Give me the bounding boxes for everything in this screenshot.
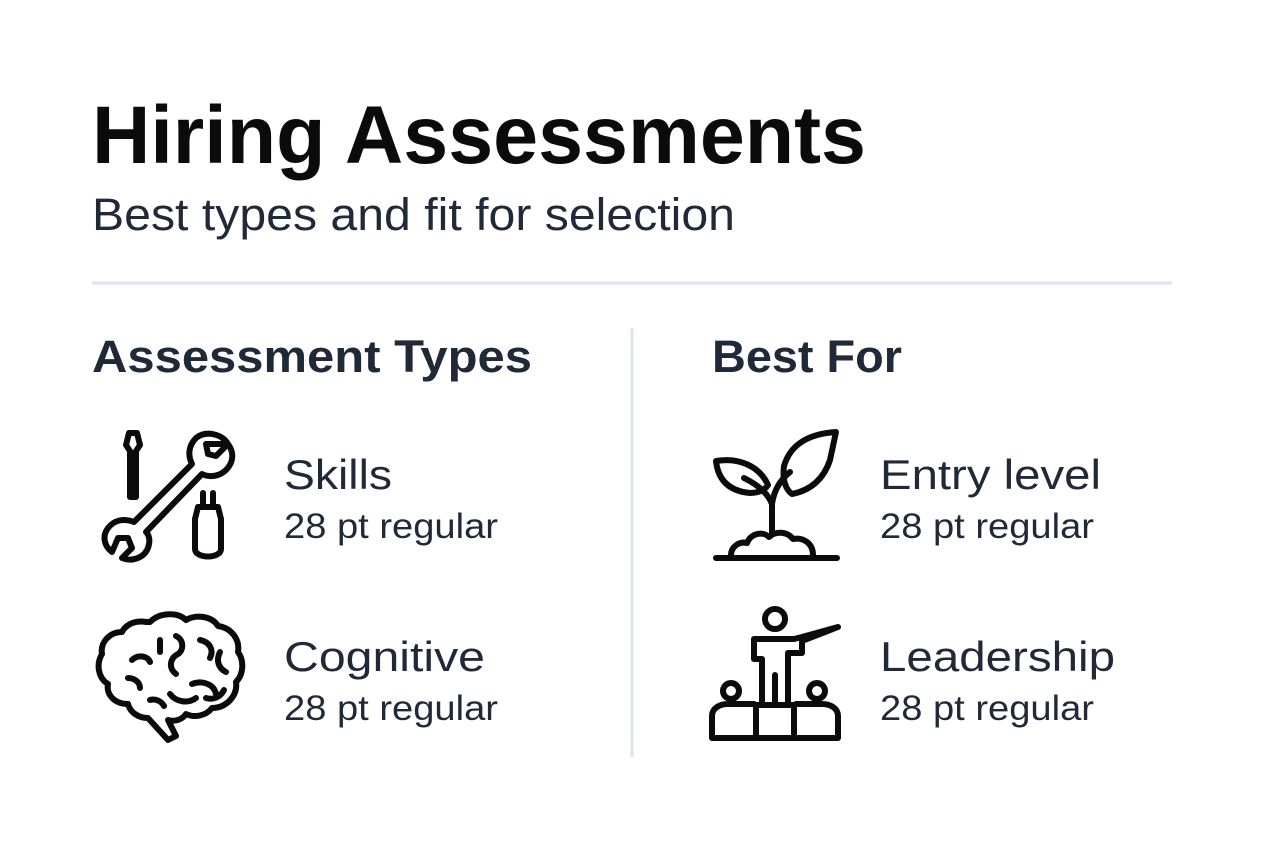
text: skills: Skills <box>284 451 392 498</box>
icon: tools <box>105 433 232 560</box>
icon: sprout <box>716 432 837 558</box>
text: skills: 28 pt regular <box>284 507 498 546</box>
title: Hiring Assessments <box>92 90 866 181</box>
text: entry level <box>880 451 1101 546</box>
heading: best for: Best For <box>712 331 902 382</box>
text: entry level: 28 pt regular <box>880 507 1094 546</box>
text: cognitive <box>284 633 498 728</box>
text: leadership <box>880 633 1115 728</box>
text: entry level: Entry level <box>880 451 1101 498</box>
text: cognitive: 28 pt regular <box>284 689 498 728</box>
text: skills <box>284 451 498 546</box>
icon: leadership <box>712 609 838 738</box>
text: cognitive: Cognitive <box>284 633 485 680</box>
text: leadership: 28 pt regular <box>880 689 1094 728</box>
subtitle: Best types and fit for selection <box>92 189 735 240</box>
heading: assessment types: Assessment Types <box>92 331 532 382</box>
text: leadership: Leadership <box>880 633 1115 680</box>
icon: brain <box>99 614 242 740</box>
